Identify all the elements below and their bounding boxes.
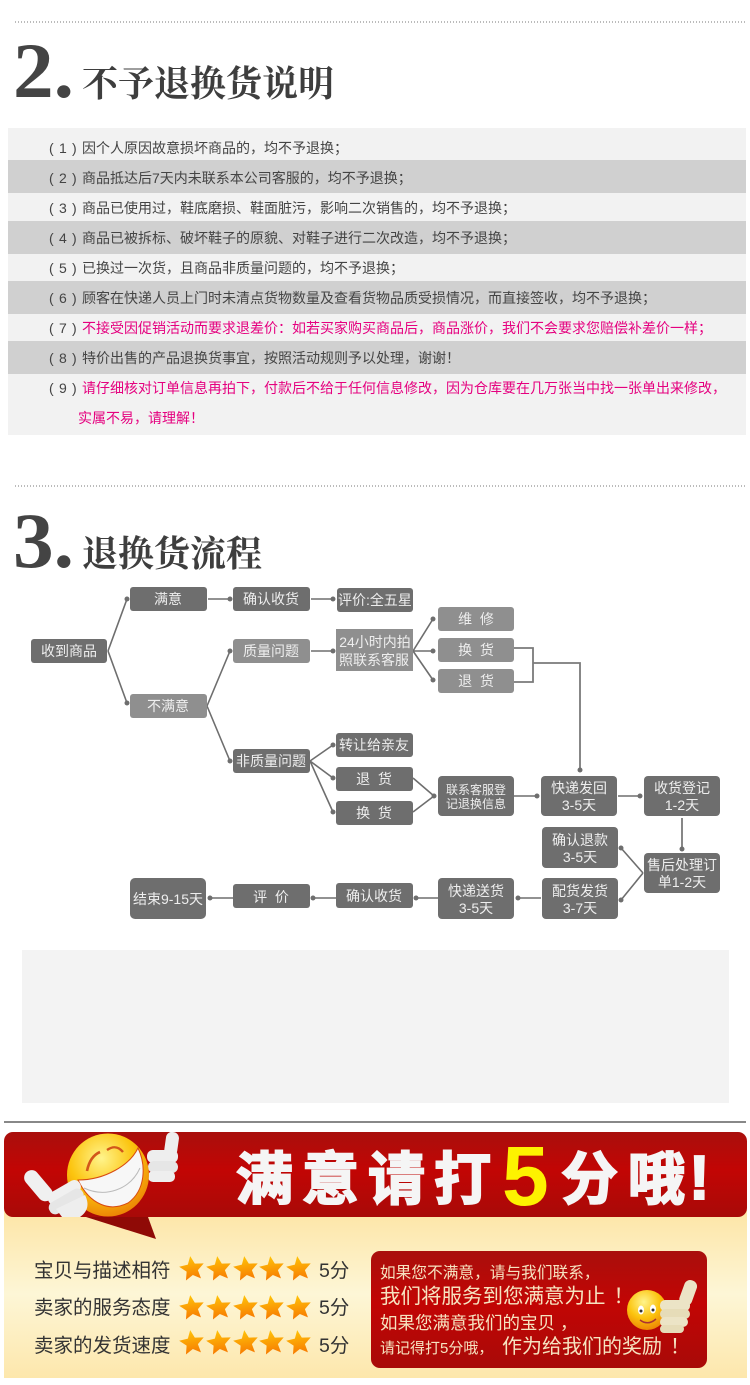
banner title: 5 <box>502 1129 549 1223</box>
box: contact service <box>438 776 514 816</box>
banner title: 哦 <box>628 1148 685 1212</box>
panel: rating banner <box>4 1129 747 1378</box>
rating row: description match: 5分 <box>319 1260 349 1282</box>
callout: service message: 我们将服务到您满意为止 ！ <box>380 1285 634 1308</box>
box: confirm refund: 确认退款 <box>552 832 608 848</box>
box: received goods: 收到商品 <box>41 643 97 659</box>
rule 8: 特价出售的产品退换货事宜，按照活动规则予以处理，谢谢！ <box>82 350 460 366</box>
heading: section 2: 2. <box>13 27 74 114</box>
rating row: shipping speed <box>34 1328 349 1357</box>
box: contact within 24h: 24小时内拍 <box>339 634 411 650</box>
heading: section 3: 3. <box>13 497 74 584</box>
box: receipt registration: 1-2天 <box>665 797 699 813</box>
rule 9: 实属不易，请理解！ <box>78 410 204 426</box>
box: return B <box>336 767 413 791</box>
banner title: 请 <box>368 1148 425 1212</box>
rule 7: ( 7 ) <box>49 320 77 336</box>
heading: section 3 <box>13 497 262 584</box>
box: end <box>130 878 206 919</box>
box: dispatch: 配货发货 <box>552 883 608 899</box>
box: ship back: 快递发回 <box>551 780 607 796</box>
rule 1: ( 1 ) <box>49 140 77 156</box>
banner title: 意 <box>302 1148 359 1212</box>
box: quality issue: 质量问题 <box>243 643 299 659</box>
box: return A: 退 货 <box>458 673 494 689</box>
connectors <box>108 596 684 902</box>
box: after-sale handling <box>644 853 720 893</box>
rule 3: 商品已使用过，鞋底磨损、鞋面脏污，影响二次销售的，均不予退换； <box>82 200 516 217</box>
rule 2: ( 2 ) <box>49 170 77 186</box>
rule 9: 请仔细核对订单信息再拍下，付款后不给于任何信息修改，因为仓库要在几万张当中找一张单出来修改， <box>82 380 726 396</box>
rating row: description match <box>34 1254 349 1282</box>
rating row: service attitude: 卖家的服务态度 <box>34 1297 171 1319</box>
rule 4: ( 4 ) <box>49 230 77 246</box>
box: contact service: 记退换信息 <box>446 796 506 811</box>
rating row: shipping speed: 5分 <box>319 1335 349 1357</box>
callout: service message: 如果您不满意，请与我们联系， <box>380 1263 600 1282</box>
box: unsatisfied: 不满意 <box>147 698 189 714</box>
box: review: 评 价 <box>253 889 289 905</box>
box: confirm refund <box>542 827 618 868</box>
heading: section 3: 退换货流程 <box>82 526 262 577</box>
callout: service message: 作为给我们的奖励 ！ <box>502 1336 690 1358</box>
box: dispatch <box>542 878 618 919</box>
rule 6: ( 6 ) <box>49 290 77 306</box>
box: non-quality issue: 非质量问题 <box>236 753 306 769</box>
box: exchange B <box>336 801 413 825</box>
banner title: 分 <box>561 1148 618 1212</box>
rule 7: 不接受因促销活动而要求退差价：如若买家购买商品后，商品涨价，我们不会要求您赔偿补差价一样； <box>82 320 712 337</box>
box: confirm receipt: 确认收货 <box>243 591 299 607</box>
box: dispatch: 3-7天 <box>563 900 597 916</box>
box: courier delivery: 快递送货 <box>448 883 504 899</box>
rule 5: ( 5 ) <box>49 260 77 276</box>
banner title: 打 <box>434 1148 491 1212</box>
box: ship back: 3-5天 <box>562 797 596 813</box>
cream background <box>4 1210 747 1378</box>
box: contact service: 联系客服登 <box>446 782 506 797</box>
box: return A <box>438 669 514 693</box>
rule 4: 商品已被拆标、破坏鞋子的原貌、对鞋子进行二次改造，均不予退换； <box>82 230 516 247</box>
box: repair: 维 修 <box>458 611 494 627</box>
box: exchange A: 换 货 <box>458 642 494 658</box>
box: courier delivery <box>438 878 514 919</box>
rule 5: 已换过一次货，且商品非质量问题的，均不予退换； <box>82 260 404 277</box>
callout: service message: 请记得打5分哦， <box>380 1340 493 1357</box>
banner title: 满 <box>236 1148 293 1212</box>
banner title <box>236 1129 710 1223</box>
box: courier delivery: 3-5天 <box>459 900 493 916</box>
box: confirm receipt <box>233 587 310 611</box>
rating row: service attitude: 5分 <box>319 1297 349 1319</box>
rating row: description match: 宝贝与描述相符 <box>34 1260 171 1282</box>
heading: section 2: 不予退换货说明 <box>82 56 334 107</box>
box: contact within 24h: 照联系客服 <box>339 652 409 668</box>
callout: service message: 如果您满意我们的宝贝 ， <box>380 1313 578 1333</box>
rating row: service attitude <box>34 1293 349 1320</box>
panel: no-return rules list <box>8 128 746 435</box>
box: end: 结束9-15天 <box>133 891 203 907</box>
blank placeholder panel <box>22 950 729 1103</box>
rule 1: 因个人原因故意损坏商品的，均不予退换； <box>82 140 348 157</box>
flow chart: return process <box>31 587 720 919</box>
box: give to friend <box>336 733 413 757</box>
box: receipt registration: 收货登记 <box>654 780 710 796</box>
box: exchange A <box>438 638 514 662</box>
rating row: shipping speed: 卖家的发货速度 <box>34 1335 171 1357</box>
box: satisfied <box>130 587 207 611</box>
box: confirm refund: 3-5天 <box>563 849 597 865</box>
rule 3: ( 3 ) <box>49 200 77 216</box>
box: give to friend: 转让给亲友 <box>339 737 409 753</box>
box: confirm receipt 2: 确认收货 <box>346 888 402 904</box>
box: exchange B: 换 货 <box>356 805 392 821</box>
box: unsatisfied <box>130 694 207 718</box>
box: ship back <box>541 776 617 816</box>
box: receipt registration <box>644 776 720 816</box>
heading: section 2 <box>13 27 334 114</box>
icon: smiley thumbs up <box>627 1278 699 1333</box>
box: repair <box>438 607 514 631</box>
box: five star review <box>337 588 413 612</box>
box: after-sale handling: 单1-2天 <box>658 874 706 890</box>
rule 8: ( 8 ) <box>49 350 77 366</box>
box: five star review: 评价:全五星 <box>338 592 412 608</box>
rule 6: 顾客在快递人员上门时未清点货物数量及查看货物品质受损情况，而直接签收，均不予退换； <box>82 290 656 307</box>
box: non-quality issue <box>233 749 310 773</box>
callout: service message <box>371 1251 707 1368</box>
box: confirm receipt 2 <box>336 883 413 908</box>
speech tail <box>86 1217 156 1239</box>
box: after-sale handling: 售后处理订 <box>647 857 717 873</box>
box: satisfied: 满意 <box>154 591 182 607</box>
rule 2: 商品抵达后7天内未联系本公司客服的，均不予退换； <box>82 170 412 187</box>
rule 9: ( 9 ) <box>49 380 77 396</box>
box: received goods <box>31 639 107 663</box>
red header bar <box>4 1132 747 1217</box>
banner title: ! <box>689 1144 710 1213</box>
box: quality issue <box>233 639 310 663</box>
box: return B: 退 货 <box>356 771 392 787</box>
box: contact within 24h <box>336 629 413 671</box>
box: review <box>233 884 310 908</box>
icon: laughing face with thumbs <box>21 1131 180 1217</box>
